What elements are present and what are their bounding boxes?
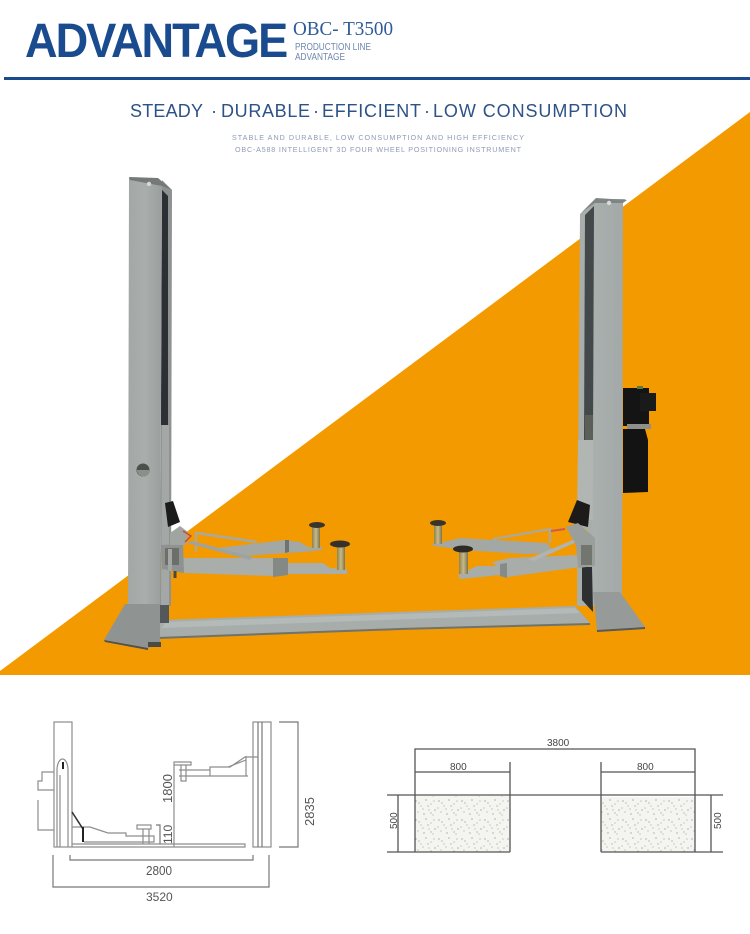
- dimension labels: side elevation: 3520: [146, 890, 173, 904]
- dimension labels: foundation plan: 800: [450, 762, 467, 773]
- dimension lines: [53, 722, 298, 887]
- arm pad lower: [453, 546, 473, 574]
- subtitle: production line advantage: PRODUCTION LINE: [295, 41, 371, 53]
- subtitle: production line advantage: ADVANTAGE: [295, 51, 345, 63]
- post hole: [136, 464, 150, 476]
- concrete block right: [601, 797, 695, 852]
- left post: [104, 177, 172, 650]
- right lift arms: [430, 500, 595, 579]
- dimension drawing: foundation plan: [387, 738, 724, 852]
- title: ADVANTAGE: ADVANTAGE: [25, 14, 288, 67]
- upper arm: [218, 540, 322, 556]
- arm pad upper: [430, 520, 446, 544]
- dimension labels: side elevation: 2835: [302, 797, 317, 826]
- diagonal brace: [528, 539, 579, 561]
- dimension labels: side elevation: 110: [161, 825, 175, 844]
- diagonal brace: [187, 541, 253, 560]
- foundation lines: [387, 749, 723, 852]
- dimension labels: foundation plan: 3800: [547, 738, 570, 749]
- arm carriage: [161, 526, 191, 578]
- dimension labels: foundation plan: [389, 738, 724, 829]
- model number: OBC- T3500: [293, 18, 393, 40]
- dimension labels: side elevation: 2800: [146, 863, 172, 878]
- dimension drawing: side elevation: [38, 722, 298, 887]
- upper arm outline: [174, 756, 258, 847]
- dimension labels: side elevation: [146, 774, 317, 904]
- orange diagonal background: [0, 112, 750, 675]
- dimension labels: foundation plan: 500: [713, 812, 724, 829]
- heading: product qualities: [130, 101, 627, 121]
- sub heading text: [232, 133, 524, 154]
- upper rod: [197, 533, 257, 542]
- heading: product qualities: ·: [211, 101, 217, 121]
- heading: product qualities: STEADY: [130, 101, 203, 121]
- sub heading text: STABLE AND DURABLE, LOW CONSUMPTION AND HIGH EFFICIENCY: [232, 133, 524, 142]
- right post: [577, 198, 645, 632]
- left base plate: [104, 604, 160, 648]
- black wedge: [165, 501, 180, 527]
- upper arm: [433, 538, 555, 554]
- dimension labels: side elevation: 1800: [160, 774, 175, 803]
- lower arm: [183, 558, 347, 576]
- arm pad upper: [309, 522, 325, 548]
- floor plate: [158, 606, 590, 639]
- black wedge: [568, 500, 590, 527]
- illustration: two-post car lift: [38, 177, 724, 904]
- arm pad lower: [330, 540, 350, 570]
- right column: [253, 722, 271, 847]
- left column: [54, 722, 72, 847]
- heading: product qualities: LOW CONSUMPTION: [433, 101, 627, 121]
- left lift arms: [161, 501, 350, 578]
- dimension labels: foundation plan: 500: [389, 812, 400, 829]
- heading: product qualities: EFFICIENT: [322, 101, 421, 121]
- upper rod: [493, 529, 550, 543]
- hydraulic power unit: [623, 386, 656, 493]
- dimension labels: foundation plan: 800: [637, 762, 654, 773]
- heading: product qualities: ·: [313, 101, 319, 121]
- lower arm: [458, 555, 580, 579]
- arm carriage: [551, 523, 595, 568]
- header title block: [25, 14, 393, 67]
- yellow label: [575, 525, 588, 537]
- lower arm outline: [72, 812, 245, 847]
- subtitle: production line advantage: [295, 41, 371, 63]
- sub heading text: OBC-A588 INTELLIGENT 3D FOUR WHEEL POSITIONING INSTRUMENT: [235, 145, 522, 154]
- power unit outline: [38, 772, 54, 830]
- heading: product qualities: DURABLE: [221, 101, 310, 121]
- concrete block left: [415, 796, 510, 852]
- heading: product qualities: ·: [424, 101, 430, 121]
- right base plate: [593, 592, 645, 630]
